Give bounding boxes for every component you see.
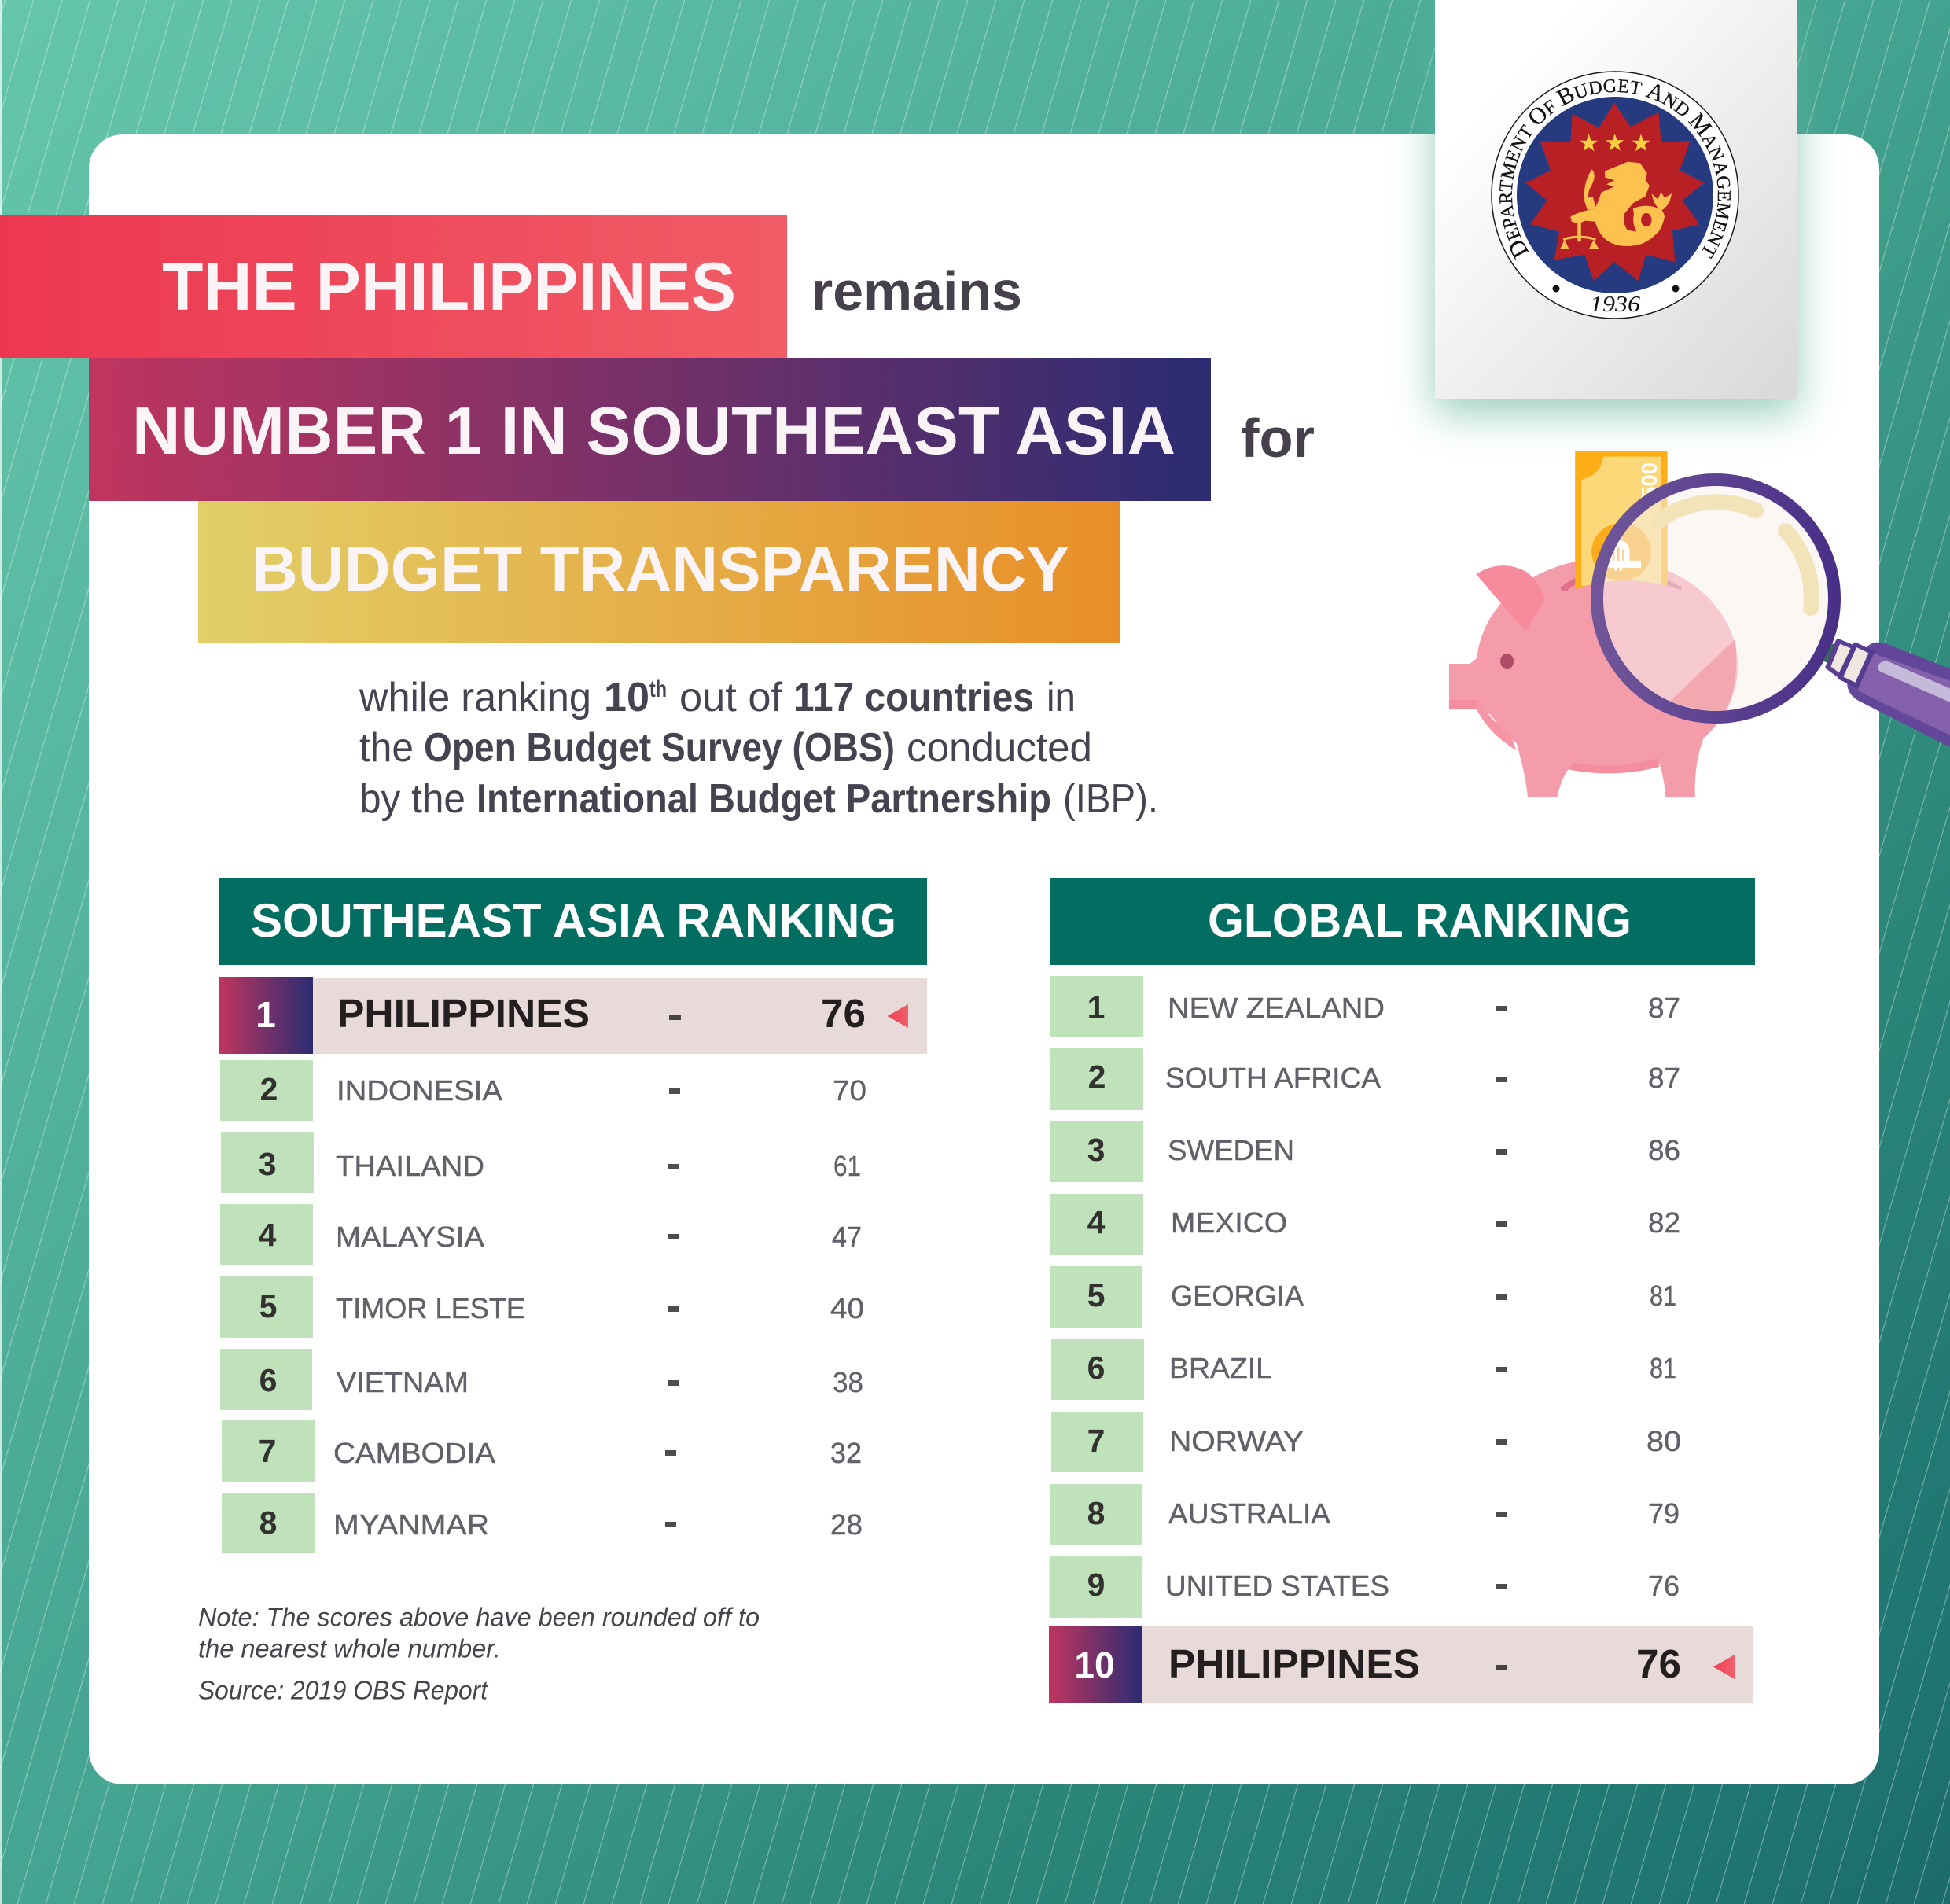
row 7: Cambodia xyxy=(222,1420,862,1482)
text block: intro paragraph: Open Budget Survey (OBS) xyxy=(424,725,895,771)
text block: intro paragraph: (IBP). xyxy=(1063,776,1158,822)
row 2: South Africa: 2 xyxy=(1088,1059,1106,1095)
text block: note and source: Source: 2019 OBS Report xyxy=(198,1675,489,1705)
row 1: New Zealand: 87 xyxy=(1648,992,1680,1024)
row 7: Cambodia: 32 xyxy=(830,1437,862,1469)
row 8: Myanmar xyxy=(222,1493,863,1553)
label: peso sign on bill: ₱ xyxy=(1598,538,1652,571)
row 8: Myanmar: 8 xyxy=(259,1504,277,1541)
row 2: Indonesia xyxy=(220,1060,866,1121)
row 6: Vietnam: 38 xyxy=(833,1366,863,1398)
row 1: Philippines highlighted xyxy=(219,977,927,1054)
icon: DBM seal: DEPARTMENT OF BUDGET AND MANAGEMENT xyxy=(1499,79,1731,260)
row 5: Georgia: 81 xyxy=(1650,1280,1676,1312)
title banner: Budget Transparency xyxy=(198,501,1120,643)
row 3: Thailand xyxy=(221,1132,861,1193)
row 1: Philippines highlighted: PHILIPPINES xyxy=(337,991,590,1036)
row 3: Sweden xyxy=(1050,1121,1680,1182)
title banner: The Philippines xyxy=(0,215,787,358)
title banner: Number 1 in Southeast Asia xyxy=(89,358,1211,501)
row 5: Georgia: GEORGIA xyxy=(1171,1280,1304,1312)
row 8: Australia: 8 xyxy=(1087,1495,1105,1531)
text block: intro paragraph: th xyxy=(649,676,667,702)
row 2: Indonesia: INDONESIA xyxy=(337,1074,502,1107)
row 2: South Africa xyxy=(1050,1048,1680,1110)
row 2: South Africa: 87 xyxy=(1648,1062,1680,1094)
row 4: Malaysia: MALAYSIA xyxy=(336,1221,484,1253)
row 3: Sweden: 3 xyxy=(1087,1132,1105,1168)
row 4: Mexico xyxy=(1050,1194,1680,1255)
text block: note and source xyxy=(198,1603,760,1705)
icon: piggy bank with peso bill xyxy=(1449,451,1738,797)
row 6: Brazil: 6 xyxy=(1087,1350,1105,1386)
row 9: United States: 9 xyxy=(1087,1567,1105,1603)
icon: DBM seal: 1936 xyxy=(1590,293,1640,317)
row 2: Indonesia: 2 xyxy=(260,1071,278,1107)
row 8: Australia: AUSTRALIA xyxy=(1168,1497,1330,1530)
row 3: Thailand: 3 xyxy=(259,1146,276,1182)
table heading: Southeast Asia Ranking: SOUTHEAST ASIA RANKING xyxy=(251,894,896,947)
text block: intro paragraph: by the xyxy=(359,776,465,822)
row 9: United States xyxy=(1049,1556,1680,1618)
text: for: for xyxy=(1241,407,1315,469)
row 10: Philippines highlighted xyxy=(1049,1626,1753,1703)
row 5: Georgia xyxy=(1050,1266,1676,1328)
row 1: New Zealand xyxy=(1050,976,1680,1037)
row 4: Malaysia: 47 xyxy=(832,1221,862,1253)
text block: note and source: Note: The scores above have been rounded off to xyxy=(198,1603,760,1631)
row 3: Sweden: 86 xyxy=(1648,1134,1680,1166)
row 4: Mexico: 4 xyxy=(1087,1204,1106,1240)
text block: intro paragraph: International Budget Partnership xyxy=(476,776,1051,822)
row 2: South Africa: SOUTH AFRICA xyxy=(1165,1062,1381,1094)
row 8: Australia xyxy=(1050,1484,1680,1545)
row 7: Norway xyxy=(1051,1412,1681,1472)
row 6: Vietnam: VIETNAM xyxy=(337,1366,469,1398)
row 1: Philippines highlighted: 76 xyxy=(821,991,866,1036)
text block: intro paragraph: while ranking xyxy=(359,675,591,720)
row 4: Malaysia: 4 xyxy=(259,1217,277,1253)
text block: intro paragraph: 117 countries xyxy=(793,675,1034,720)
table heading: Global Ranking xyxy=(1050,878,1755,965)
row 7: Cambodia: 7 xyxy=(259,1433,276,1469)
row 7: Cambodia: CAMBODIA xyxy=(333,1437,495,1469)
table heading: Southeast Asia Ranking xyxy=(219,878,927,965)
title banner: Budget Transparency: BUDGET TRANSPARENCY xyxy=(252,534,1069,605)
row 4: Mexico: 82 xyxy=(1648,1206,1680,1239)
row 5: Georgia: 5 xyxy=(1087,1277,1105,1313)
row 6: Vietnam xyxy=(220,1349,863,1410)
row 8: Myanmar: 28 xyxy=(830,1508,863,1541)
row 6: Brazil xyxy=(1051,1339,1676,1400)
title banner: Number 1 in Southeast Asia: NUMBER 1 IN SOUTHEAST ASIA xyxy=(132,394,1176,469)
row 3: Thailand: 61 xyxy=(833,1150,861,1182)
row 10: Philippines highlighted: PHILIPPINES xyxy=(1168,1641,1420,1686)
text block: intro paragraph xyxy=(359,675,1158,822)
text block: intro paragraph: the xyxy=(359,725,414,771)
text block: intro paragraph: 10 xyxy=(604,675,649,720)
row 1: New Zealand: 1 xyxy=(1087,989,1105,1026)
row 8: Myanmar: MYANMAR xyxy=(333,1508,489,1541)
row 3: Thailand: THAILAND xyxy=(336,1150,484,1182)
row 4: Mexico: MEXICO xyxy=(1171,1206,1287,1239)
row 9: United States: UNITED STATES xyxy=(1165,1570,1389,1602)
text: remains: remains xyxy=(811,260,1022,322)
DBM seal document panel xyxy=(1407,0,1826,441)
row 10: Philippines highlighted: 76 xyxy=(1636,1641,1681,1686)
text block: intro paragraph: out of xyxy=(679,675,783,720)
row 2: Indonesia: 70 xyxy=(833,1074,866,1107)
panel: Southeast Asia ranking table xyxy=(219,878,927,1553)
row 4: Malaysia xyxy=(220,1204,862,1265)
table heading: Global Ranking: GLOBAL RANKING xyxy=(1208,894,1632,947)
row 6: Vietnam: 6 xyxy=(259,1362,277,1398)
row 7: Norway: 80 xyxy=(1646,1425,1681,1457)
icon: magnifying glass rim and handle xyxy=(1597,480,1950,771)
title banner: The Philippines: THE PHILIPPINES xyxy=(162,249,736,325)
row 5: Timor Leste: 5 xyxy=(259,1288,277,1324)
row 5: Timor Leste xyxy=(220,1276,864,1338)
magnifier glass lens xyxy=(1602,485,1829,712)
row 1: New Zealand: NEW ZEALAND xyxy=(1168,992,1385,1024)
row 6: Brazil: BRAZIL xyxy=(1169,1352,1272,1384)
row 1: Philippines highlighted: 1 xyxy=(256,994,276,1035)
panel: white card xyxy=(89,134,1879,1784)
panel: Global ranking table xyxy=(1049,878,1755,1703)
text block: intro paragraph: in xyxy=(1047,675,1076,720)
row 8: Australia: 79 xyxy=(1648,1497,1680,1530)
row 7: Norway: NORWAY xyxy=(1169,1425,1304,1457)
row 3: Sweden: SWEDEN xyxy=(1168,1134,1294,1166)
label: 500 on bill: 500 xyxy=(1637,462,1661,499)
row 5: Timor Leste: TIMOR LESTE xyxy=(336,1292,525,1324)
row 6: Brazil: 81 xyxy=(1650,1352,1676,1384)
row 10: Philippines highlighted: 10 xyxy=(1074,1644,1115,1685)
text block: note and source: the nearest whole number. xyxy=(198,1634,501,1663)
row 5: Timor Leste: 40 xyxy=(830,1292,864,1324)
text block: intro paragraph: conducted xyxy=(907,725,1092,771)
row 7: Norway: 7 xyxy=(1087,1423,1105,1459)
row 9: United States: 76 xyxy=(1648,1570,1680,1602)
